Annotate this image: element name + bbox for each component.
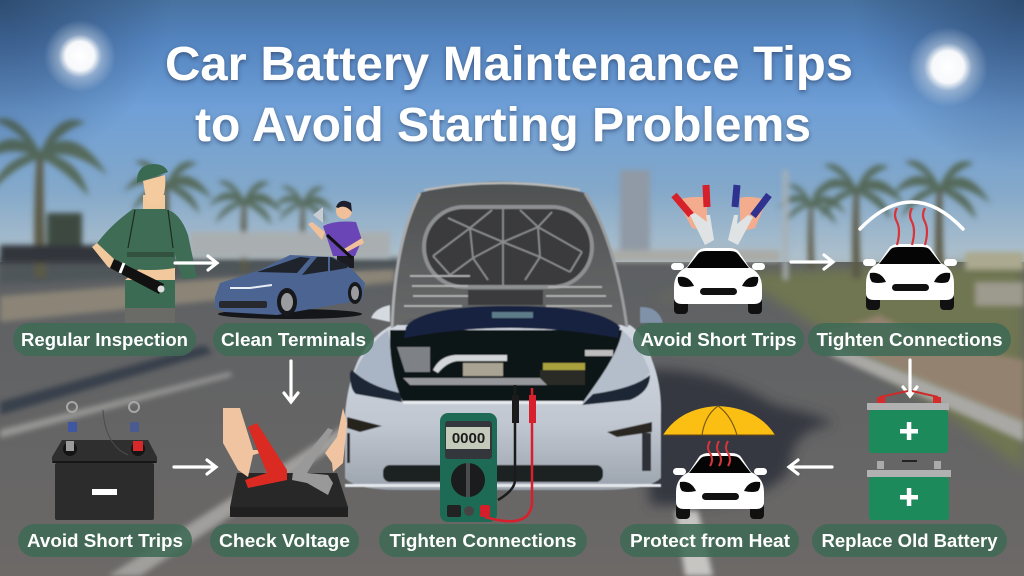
pill: check voltage: Check Voltage — [219, 531, 350, 551]
pill: avoid short trips top — [633, 323, 804, 356]
arrow: down to batteries — [903, 360, 917, 396]
pill: tighten connections top — [808, 323, 1011, 356]
multimeter icon: 0000 — [452, 430, 485, 447]
pill: replace old battery: Replace Old Battery — [822, 531, 998, 551]
arrow: battery to voltage check — [174, 460, 216, 474]
arrow: inspection to terminals — [175, 256, 217, 270]
icon: blue car with man — [215, 201, 365, 319]
background: blurred palms and city — [0, 118, 991, 282]
arrow: clamps to heat car — [791, 255, 833, 269]
pill: replace old battery — [812, 524, 1007, 557]
pill: clean terminals: Clean Terminals — [221, 330, 366, 350]
title: Car Battery Maintenance Tips — [165, 38, 853, 91]
multimeter icon — [440, 385, 536, 522]
pill: tighten connections bottom — [379, 524, 587, 557]
hand and grey clamp — [292, 428, 333, 495]
side mirrors — [371, 305, 390, 322]
background photo: ground and road — [0, 252, 1024, 576]
icon: white car with clamps — [671, 185, 769, 314]
icon: car under yellow umbrella — [663, 406, 775, 519]
background photo: sky — [0, 0, 1024, 270]
hand and red clamp — [223, 408, 270, 477]
pill: avoid short trips bottom: Avoid Short Trips — [27, 531, 183, 551]
terminal markers — [67, 402, 139, 412]
sky corner shading — [0, 0, 1024, 170]
engine bay — [390, 330, 622, 402]
hood underside — [392, 182, 627, 328]
arrow: batteries to umbrella car — [789, 460, 832, 474]
pill: regular inspection: Regular Inspection — [21, 330, 188, 350]
title — [165, 38, 853, 152]
sun glare right — [908, 27, 988, 107]
pill: regular inspection — [13, 323, 196, 356]
multimeter probes — [498, 385, 515, 500]
pill: protect from heat: Protect from Heat — [630, 531, 790, 551]
icon: clamps on battery — [223, 408, 348, 517]
labels row — [13, 323, 1011, 557]
pill: avoid short trips bottom — [18, 524, 192, 557]
car body — [345, 325, 661, 490]
icon: inspector with flashlight — [92, 164, 197, 323]
sun glare left — [44, 20, 116, 92]
icon: stacked green batteries — [867, 391, 951, 520]
icon: car battery with terminal posts — [52, 402, 157, 520]
grille and fog lights — [383, 465, 603, 482]
hood insulation pad — [424, 207, 592, 287]
pill: tighten connections bottom: Tighten Connections — [390, 531, 576, 551]
headlights — [350, 370, 402, 402]
pill: protect from heat — [620, 524, 799, 557]
title: to Avoid Starting Problems — [195, 99, 811, 152]
pill: check voltage — [210, 524, 359, 557]
icon: white car under arc with heat — [860, 202, 963, 310]
pill: clean terminals — [213, 323, 374, 356]
central car with open hood — [345, 182, 663, 490]
arrow: terminals down to voltage — [284, 361, 298, 402]
pill: tighten connections top: Tighten Connections — [816, 330, 1002, 350]
man — [308, 201, 364, 268]
flashlight — [110, 259, 164, 294]
pill: avoid short trips top: Avoid Short Trips — [640, 330, 796, 350]
